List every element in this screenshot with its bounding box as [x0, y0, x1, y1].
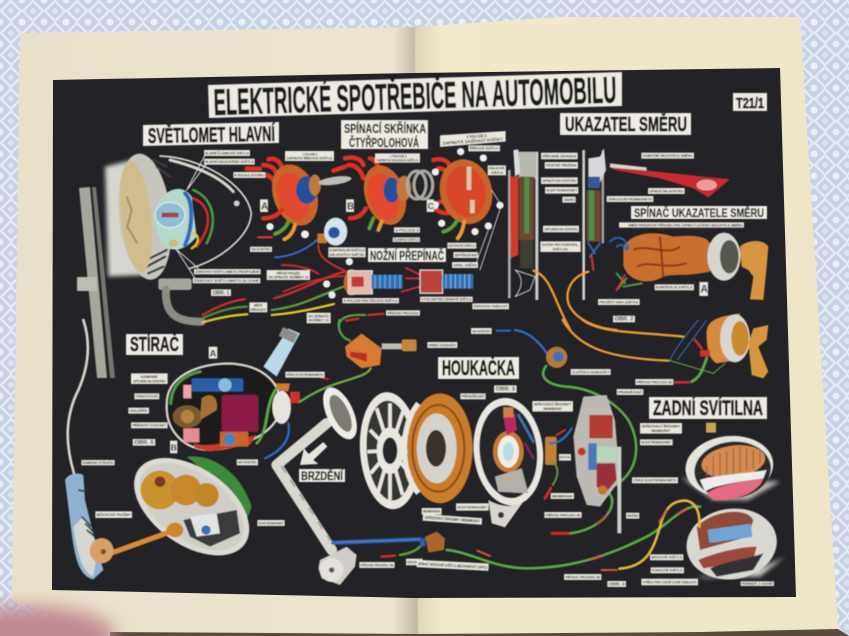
labels lower right: PŘÍVOD PROUDU 30	[546, 512, 581, 517]
foot switch right half	[420, 270, 473, 293]
heading: zadni svitilna	[649, 397, 767, 420]
labels lower right: TLAČÍTKO HOUKAČKY	[572, 369, 610, 374]
labels upper left: OBR. 1	[213, 291, 229, 297]
labels lower left: KAMENNÉ	[141, 374, 158, 379]
heading: svetlomet hlavni	[143, 122, 279, 148]
labels upper left: SKŘÍŇKY 11	[308, 318, 330, 323]
horn cover	[356, 390, 424, 511]
connector with plug	[300, 320, 417, 402]
lower left illustrations	[65, 320, 424, 585]
upper left illustrations	[105, 150, 426, 330]
labels upper left: ZAPNUTÁ DÁLKOVÁ SVĚTLA	[377, 158, 418, 163]
labels upper right: ZAPNUTÁ ZAŽÍHACÍ SVÍČKY	[442, 136, 504, 146]
labels lower left: SPOJENÍ NA KOSTRU	[133, 378, 165, 383]
heading: stirac	[126, 332, 183, 356]
tail lamp upper	[680, 423, 780, 502]
turn-signal switch	[610, 233, 768, 300]
brake pedal	[277, 382, 364, 585]
dark poster panel	[52, 68, 796, 598]
labels lower right: SEŘIZOVACÍ ŠROUBKY	[534, 402, 572, 407]
poster artwork	[65, 68, 785, 588]
labels upper right: DÁLKOVÉ	[489, 166, 505, 171]
switch A	[247, 158, 352, 239]
foot dimmer switch	[323, 258, 420, 299]
labels lower right: SEŘIZOVACÍ ŠROUBKY	[642, 424, 681, 429]
labels lower left: PŘÍDAVNÝ KONTAKT	[132, 423, 167, 428]
labels lower right: VÝŘEZ PRO OSVĚTLENÍ TABULKY	[643, 579, 697, 584]
horn diaphragm	[404, 393, 473, 503]
spare ring	[407, 171, 426, 199]
heading: spinaci skrinka	[341, 120, 428, 150]
label A: A	[261, 201, 268, 212]
labels upper left: NA KOSTRU	[251, 247, 271, 252]
labels upper left: V POLOZE 3	[395, 227, 419, 232]
labels lower right: SPÍNAČ BRZDOVÉ SVĚTLA MECHANICKÝ ZAPOJ	[418, 561, 487, 570]
labels upper right	[420, 131, 744, 323]
labels lower right: PŘERUŠOVAČ	[462, 394, 484, 399]
labels lower right: MEMBRÁNA	[423, 509, 440, 514]
labels upper left: 1 POLOHA 2	[303, 151, 318, 156]
labels upper left: ŽÁROVKY SVĚTLOMETU DLOUHÉ	[194, 278, 259, 283]
labels lower right: SEŘIZOVACÍ ŠROUBKY MEMBRÁNY	[425, 515, 480, 524]
heading: ukazatel smeru	[560, 112, 691, 136]
stop-light switch	[420, 532, 445, 553]
sheet number	[733, 93, 767, 112]
green feed wire	[339, 314, 383, 330]
labels lower right: ELEKTROMAGNET	[641, 440, 672, 445]
labels upper right: ŠÍŘKOVÉ SVĚTLO	[470, 146, 499, 151]
tail lamp lower	[682, 503, 785, 585]
thumb at lower left	[0, 606, 115, 636]
labels lower right: KONCOVÉ SVĚTLO	[652, 568, 683, 573]
labels upper left: PŘÍVOD PROUDU	[387, 310, 419, 315]
right page	[415, 17, 838, 636]
labels lower right: NA KOSTRU	[472, 328, 490, 333]
labels upper right: DOTEK PRO KONTROL.	[542, 242, 579, 247]
labels upper right: KONTROLNÍ SVĚTLO	[656, 285, 693, 290]
labels upper right: SAMOTNÉ UKAZATELE SMĚRU	[643, 153, 693, 158]
labels upper right: OBR. 2	[615, 317, 633, 323]
labels lower right: SPÍNAČ HOUKAČKY	[429, 342, 456, 347]
labels upper left: HLAVNÍ ČLÁNKOVÉ SVĚTLA	[205, 150, 249, 155]
brake cable	[333, 539, 420, 557]
heading: houkacka	[438, 356, 519, 380]
labels lower right: PERNICKÝ, Z. KOVÁŘ	[742, 581, 773, 586]
brake direction arrow	[300, 442, 327, 465]
heading: spinaci skrinka: ČTYŘPOLOHOVÁ	[349, 135, 419, 150]
heading: nozni prepinac: NOŽNÍ PŘEPÍNAČ	[370, 248, 444, 263]
heading: houkacka: HOUKAČKA	[442, 356, 515, 380]
labels lower right: OBR. 3	[496, 387, 515, 393]
labels upper right: CÍVKA ELEKTROMAGNETU	[608, 196, 652, 201]
labels upper left: DO SPÍNAČE	[308, 313, 329, 318]
label B	[170, 441, 177, 453]
labels lower left: OBR. 5	[134, 440, 154, 446]
labels upper left: MÍZE	[254, 303, 263, 308]
trafficator arm	[608, 163, 730, 197]
wiper arm and blade	[65, 320, 103, 579]
labels upper right: UPNUTÍ NA KOSTRU	[649, 188, 683, 193]
labels upper left: ŽÁROVKY SVĚTLOMETU PROPOJENÍ	[195, 269, 260, 274]
labels lower right: PŘÍVOD PROUDU 30	[565, 574, 601, 579]
sheet number: T21/1	[736, 95, 764, 112]
labels lower right: MEMBRÁNA	[552, 493, 573, 498]
label C: C	[428, 201, 435, 211]
labels lower right: PŘÍVOD PROUDU 30	[637, 379, 673, 384]
labels upper left: DÁLKOVÝCH SVĚTEL	[329, 252, 365, 257]
heading: nozni prepinac	[368, 248, 446, 263]
indicator column: left	[508, 149, 538, 300]
labels lower right: DRŽÁK	[627, 513, 638, 518]
title	[208, 68, 622, 123]
labels upper right: SVĚTLO	[491, 170, 503, 175]
labels upper left: 1 POLOHA 3	[390, 153, 407, 158]
labels lower left: ELEKTROMAGNET	[259, 520, 284, 525]
labels lower left	[81, 372, 423, 568]
labels upper right: SVĚTLKU	[553, 246, 568, 251]
upper right illustrations	[414, 131, 768, 330]
labels lower right: ELEKTROMAGNET	[457, 504, 488, 509]
heading: stirac: STÍRAČ	[130, 332, 179, 356]
horn button and feed	[497, 330, 636, 533]
labels lower right: MEMBRÁNY	[652, 428, 671, 433]
label C	[427, 199, 435, 212]
labels lower left: PŘÍVOD PROUDU 30	[361, 562, 394, 567]
heading: spinac ukazatele smeru: SPÍNAČ UKAZATELE SMĚRU	[634, 205, 764, 220]
switch B	[333, 158, 413, 230]
labels upper left: ČLENITKA SVĚTLA	[394, 237, 419, 242]
labels upper right: ELEKTROMAGNET	[546, 188, 577, 193]
labels upper left	[193, 150, 420, 323]
labels upper right: K POLOZE PRO ZÁRNOVÉ SVĚTLA	[421, 297, 471, 302]
indicator column: right	[582, 148, 606, 300]
labels lower right: PŘERUŠOVAČ	[618, 389, 642, 394]
label A: A	[210, 349, 217, 359]
heading: ukazatel smeru: UKAZATEL SMĚRU	[565, 112, 687, 136]
heading: spinaci skrinka: SPÍNACÍ SKŘÍNKA	[344, 121, 426, 136]
wiper motor A	[167, 327, 300, 458]
labels upper right: V POLOZE 3	[466, 133, 487, 139]
left page	[12, 27, 418, 636]
switch C	[431, 148, 504, 270]
stop-light green and yellow wires	[447, 501, 700, 570]
labels lower right: MEMBRÁNY	[543, 406, 562, 411]
labels lower left: HALEŘÍK	[130, 408, 148, 413]
control lamp	[275, 218, 347, 272]
horn body	[468, 394, 548, 527]
labels upper right: VRATNÁ PRUŽINA	[546, 163, 577, 168]
labels lower left: STÍRACÍ KOTOUČ	[136, 394, 158, 399]
labels upper right: PŘÍVODNÍ ZÁPADKA	[542, 153, 576, 158]
labels upper left: K POLOZE PRO ČÁLOVÁ SVĚTLA	[344, 298, 398, 303]
labels upper right: UPOJENÍ NA KOSTRU	[544, 226, 578, 231]
labels lower right	[417, 328, 774, 588]
horn wires	[545, 428, 572, 498]
table edge at bottom	[110, 629, 849, 636]
labels lower left: UPEVNĚNÍ	[407, 559, 422, 564]
labels upper right: SPÍNÁNÍ	[455, 252, 478, 257]
labels lower right: OBR. 4	[609, 582, 625, 588]
labels upper left: PŘÍVODY	[251, 307, 266, 312]
labels upper right: A	[700, 284, 708, 296]
labels lower right: KOTVA	[560, 455, 570, 460]
labels upper left: ZAPNUTÁ ŠÍŘKOVÁ SVĚTLA	[287, 156, 332, 161]
labels upper left: K REGULÁTORU	[234, 172, 264, 177]
labels upper left: KONTROLNÍ SVĚTLO	[329, 248, 365, 253]
orange wires	[533, 271, 617, 330]
heading: svetlomet hlavni: SVĚTLOMET HLAVNÍ	[148, 122, 276, 148]
corrugated cable and wire bundle	[158, 265, 345, 322]
wiper motor B	[90, 438, 267, 575]
label B: B	[171, 442, 177, 452]
labels lower left: RAMENO STÍRAČE	[83, 460, 114, 465]
two-position switch and lever	[563, 313, 768, 382]
heading: zadni svitilna: ZADNÍ SVÍTILNA	[653, 397, 763, 420]
labels upper left: PŘÍVOD PROUDU	[277, 270, 300, 275]
label B: B	[347, 201, 354, 212]
lower right illustrations	[404, 313, 785, 588]
heading: brzdeni: BRZDĚNÍ	[301, 468, 344, 483]
labels upper left: HLAVNÍ DÁLKOVÉHO SVĚTLA	[205, 159, 254, 164]
labels lower right: BRZDOVÉ SVĚTLO	[651, 555, 682, 560]
labels upper right: JÁDRO	[564, 197, 574, 202]
labels upper right: DOTYKOVÉ SVĚTLO	[449, 243, 475, 248]
labels upper right: PROŽÍVÝ NÁKLENÍTKA	[599, 299, 638, 304]
horn cross-section	[573, 395, 621, 533]
labels upper right: SMĚR PROUDOVÉ PŘÍVODU PRO ZAPNUTÍ LEVÉHO UKAZATELE SMĚRU	[628, 222, 743, 227]
labels upper right: UPNUTÍ NA KOSTRU	[542, 178, 576, 183]
labels upper right: ZAPAL. SVÍČKA	[453, 262, 477, 267]
wiper mounting rod	[77, 187, 115, 378]
labels lower left: NA KOSTRU	[238, 460, 257, 465]
labels lower left: MŮSTKOVÉ PRUŽINY	[97, 512, 131, 517]
label A	[209, 347, 217, 359]
labels lower right: CÍVKA ELEKTROMAGNETU	[633, 478, 677, 483]
labels upper right: ŽÁROVKA TABULKY	[474, 304, 508, 309]
headlight	[105, 151, 251, 282]
labels upper left: OD SPÍNAČE SKŘÍŇKY 14	[268, 275, 309, 280]
spinner left tip	[414, 171, 433, 199]
labels lower left: CÍVKA ELEKTROMAGNETU	[287, 372, 323, 377]
